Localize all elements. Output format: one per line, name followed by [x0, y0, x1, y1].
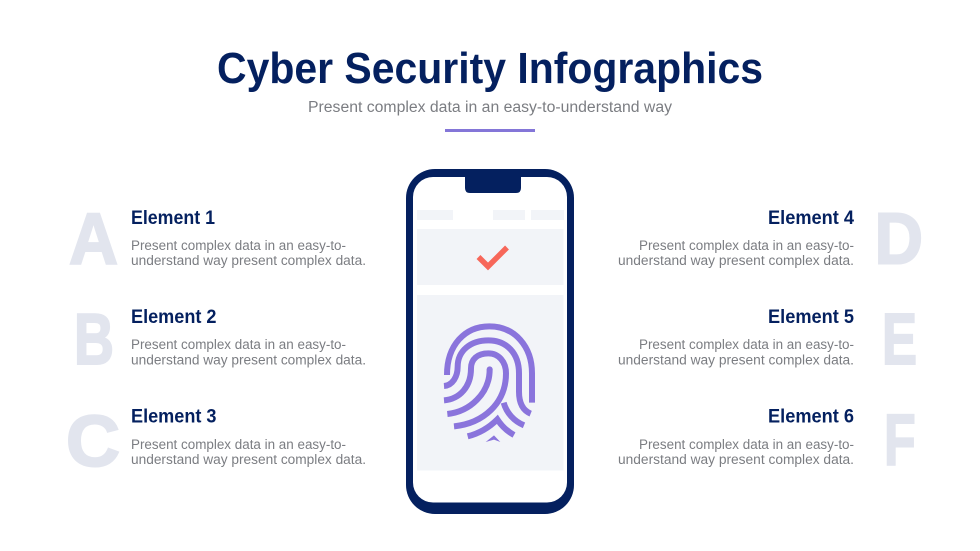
phone screen	[413, 177, 567, 502]
element 6 text block: Present complex data in an easy-to-	[639, 437, 854, 452]
element 3 text block: Element 3	[131, 406, 216, 428]
element 4 text block: understand way present complex data.	[618, 253, 854, 268]
element 5 text block: Present complex data in an easy-to-	[639, 337, 854, 352]
phone notch	[465, 176, 521, 193]
element 1 text block: understand way present complex data.	[131, 253, 366, 268]
title: Cyber Security Infographics	[217, 44, 763, 93]
status bars	[417, 210, 564, 220]
element 2 text block: Element 2	[131, 307, 216, 328]
letter D: D	[874, 200, 923, 280]
element 3 text block	[131, 406, 366, 467]
element 6 text block: understand way present complex data.	[618, 452, 854, 467]
element 4 text block: Present complex data in an easy-to-	[639, 238, 854, 253]
panel: fingerprint	[417, 295, 564, 470]
element 3 text block: Present complex data in an easy-to-	[131, 437, 346, 452]
title accent bar	[445, 129, 535, 132]
element 1 text block	[131, 208, 366, 268]
element 2 text block	[131, 307, 366, 368]
letter B: B	[74, 300, 114, 380]
element 4 text block: Element 4	[768, 208, 854, 229]
element 6 text block: Element 6	[768, 406, 854, 428]
element 4 text block	[618, 208, 854, 268]
element 5 text block: understand way present complex data.	[618, 352, 854, 368]
icon: check mark	[478, 248, 507, 266]
element 1 text block: Present complex data in an easy-to-	[131, 238, 346, 253]
element 6 text block	[618, 406, 854, 467]
element 2 text block: understand way present complex data.	[131, 352, 366, 368]
element 2 text block: Present complex data in an easy-to-	[131, 337, 346, 352]
phone	[406, 169, 574, 514]
element 1 text block: Element 1	[131, 208, 215, 229]
letter F: F	[884, 401, 916, 481]
element 5 text block: Element 5	[768, 307, 854, 328]
letter A: A	[69, 200, 118, 280]
phone body	[406, 169, 574, 514]
element 5 text block	[618, 307, 854, 368]
element 3 text block: understand way present complex data.	[131, 452, 366, 467]
icon: fingerprint	[444, 326, 532, 442]
subtitle: Present complex data in an easy-to-understand way	[308, 99, 672, 116]
letter E: E	[882, 300, 917, 380]
panel: check	[417, 229, 564, 285]
letter C: C	[66, 402, 120, 482]
